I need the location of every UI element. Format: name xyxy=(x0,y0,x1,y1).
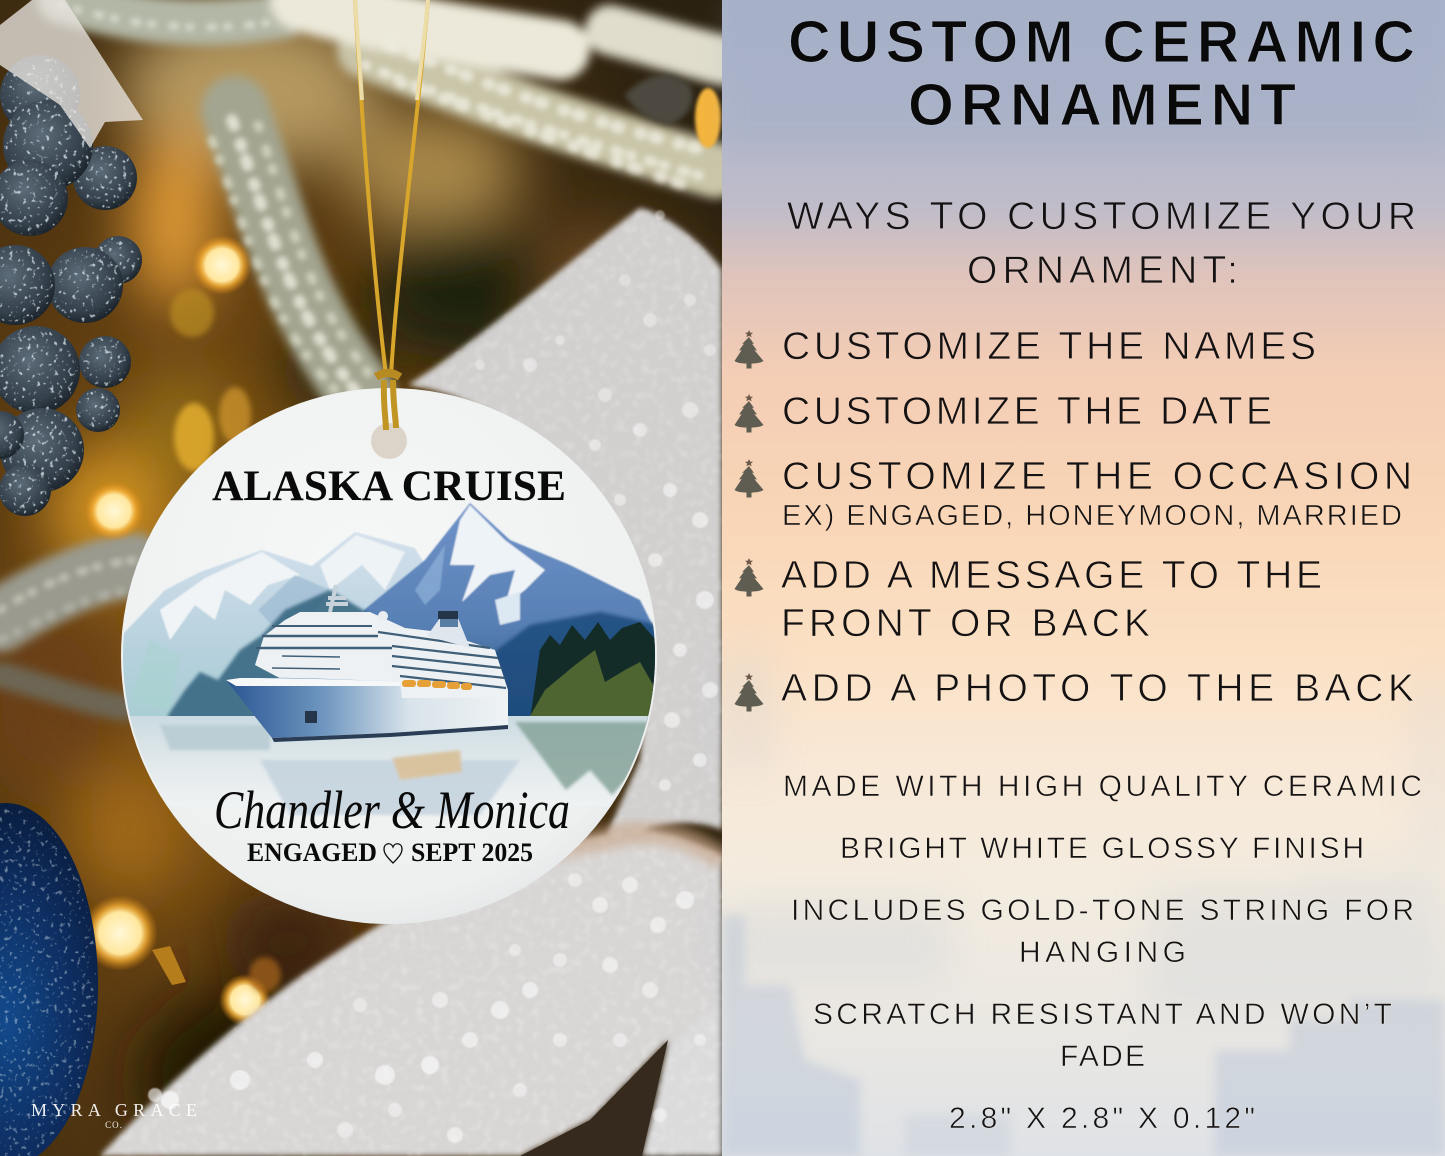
gold hanging string xyxy=(355,0,428,377)
panel: product photo xyxy=(0,0,722,1156)
item: occasion: EX) ENGAGED, HONEYMOON, MARRIED xyxy=(782,500,1402,532)
product features: INCLUDES GOLD-TONE STRING FOR xyxy=(791,894,1414,927)
water reflections xyxy=(160,722,650,815)
hanging hole xyxy=(371,423,407,459)
customization list xyxy=(734,325,1414,712)
item: message: FRONT OR BACK xyxy=(781,602,1150,645)
brand logo xyxy=(32,1104,196,1128)
item: message xyxy=(734,554,1322,645)
panel: product details xyxy=(722,0,1445,1156)
ornament heading: ALASKA CRUISE xyxy=(212,463,566,510)
tulle ribbon xyxy=(0,0,143,148)
product features: SCRATCH RESISTANT AND WON’T xyxy=(813,998,1392,1031)
product features: HANGING xyxy=(1019,936,1186,969)
brand logo: MYRA GRACE xyxy=(31,1100,197,1120)
frosted pine branches xyxy=(0,0,722,708)
dark treeline left xyxy=(168,590,380,720)
right forest and cliff xyxy=(530,622,656,725)
gold string loop xyxy=(384,380,396,430)
lake water xyxy=(130,716,648,784)
engagement date line: ENGAGED xyxy=(247,838,377,867)
dark blue glitter bauble xyxy=(0,803,98,1156)
item: date: CUSTOMIZE THE DATE xyxy=(782,390,1272,433)
dark leaf shadow xyxy=(625,75,692,125)
silver glitter ribbon xyxy=(100,208,722,1156)
hull xyxy=(226,678,508,738)
item: message: ADD A MESSAGE TO THE xyxy=(781,554,1322,597)
item: occasion: CUSTOMIZE THE OCCASION xyxy=(782,455,1412,498)
glitter bokeh xyxy=(148,210,718,1143)
item: names: CUSTOMIZE THE NAMES xyxy=(782,325,1316,368)
central blue peak xyxy=(360,503,660,730)
subheading: ORNAMENT: xyxy=(967,249,1238,292)
radar dome xyxy=(378,611,388,620)
left snowy mountains xyxy=(123,532,423,739)
product features: BRIGHT WHITE GLOSSY FINISH xyxy=(840,832,1364,865)
engagement date line: SEPT 2025 xyxy=(411,838,533,867)
faint skyline silhouette xyxy=(722,0,1445,1156)
glitter berries cluster xyxy=(0,55,142,516)
subheading: WAYS TO CUSTOMIZE YOUR xyxy=(787,195,1416,238)
watercolor cruise scene xyxy=(122,503,662,815)
funnel xyxy=(427,618,470,648)
subheading xyxy=(787,195,1416,292)
engagement date line xyxy=(247,843,532,864)
lifeboats xyxy=(402,680,472,690)
superstructure xyxy=(255,612,508,700)
main title: CUSTOM CERAMIC xyxy=(788,9,1415,75)
bokeh lights xyxy=(82,88,721,1026)
main title xyxy=(788,9,1415,138)
main title: ORNAMENT xyxy=(908,72,1296,138)
ceramic ornament xyxy=(121,380,662,924)
product features: 2.8" X 2.8" X 0.12" xyxy=(949,1102,1255,1135)
product features xyxy=(783,770,1422,1135)
brand logo: CO. xyxy=(105,1120,123,1130)
product features: FADE xyxy=(1060,1040,1145,1073)
item: occasion xyxy=(734,455,1412,532)
product features: MADE WITH HIGH QUALITY CERAMIC xyxy=(783,770,1422,803)
cruise ship xyxy=(226,585,508,742)
personalized names: Chandler & Monica xyxy=(214,780,570,840)
item: photo: ADD A PHOTO TO THE BACK xyxy=(781,667,1414,710)
warm and dark background tones xyxy=(0,10,710,1156)
